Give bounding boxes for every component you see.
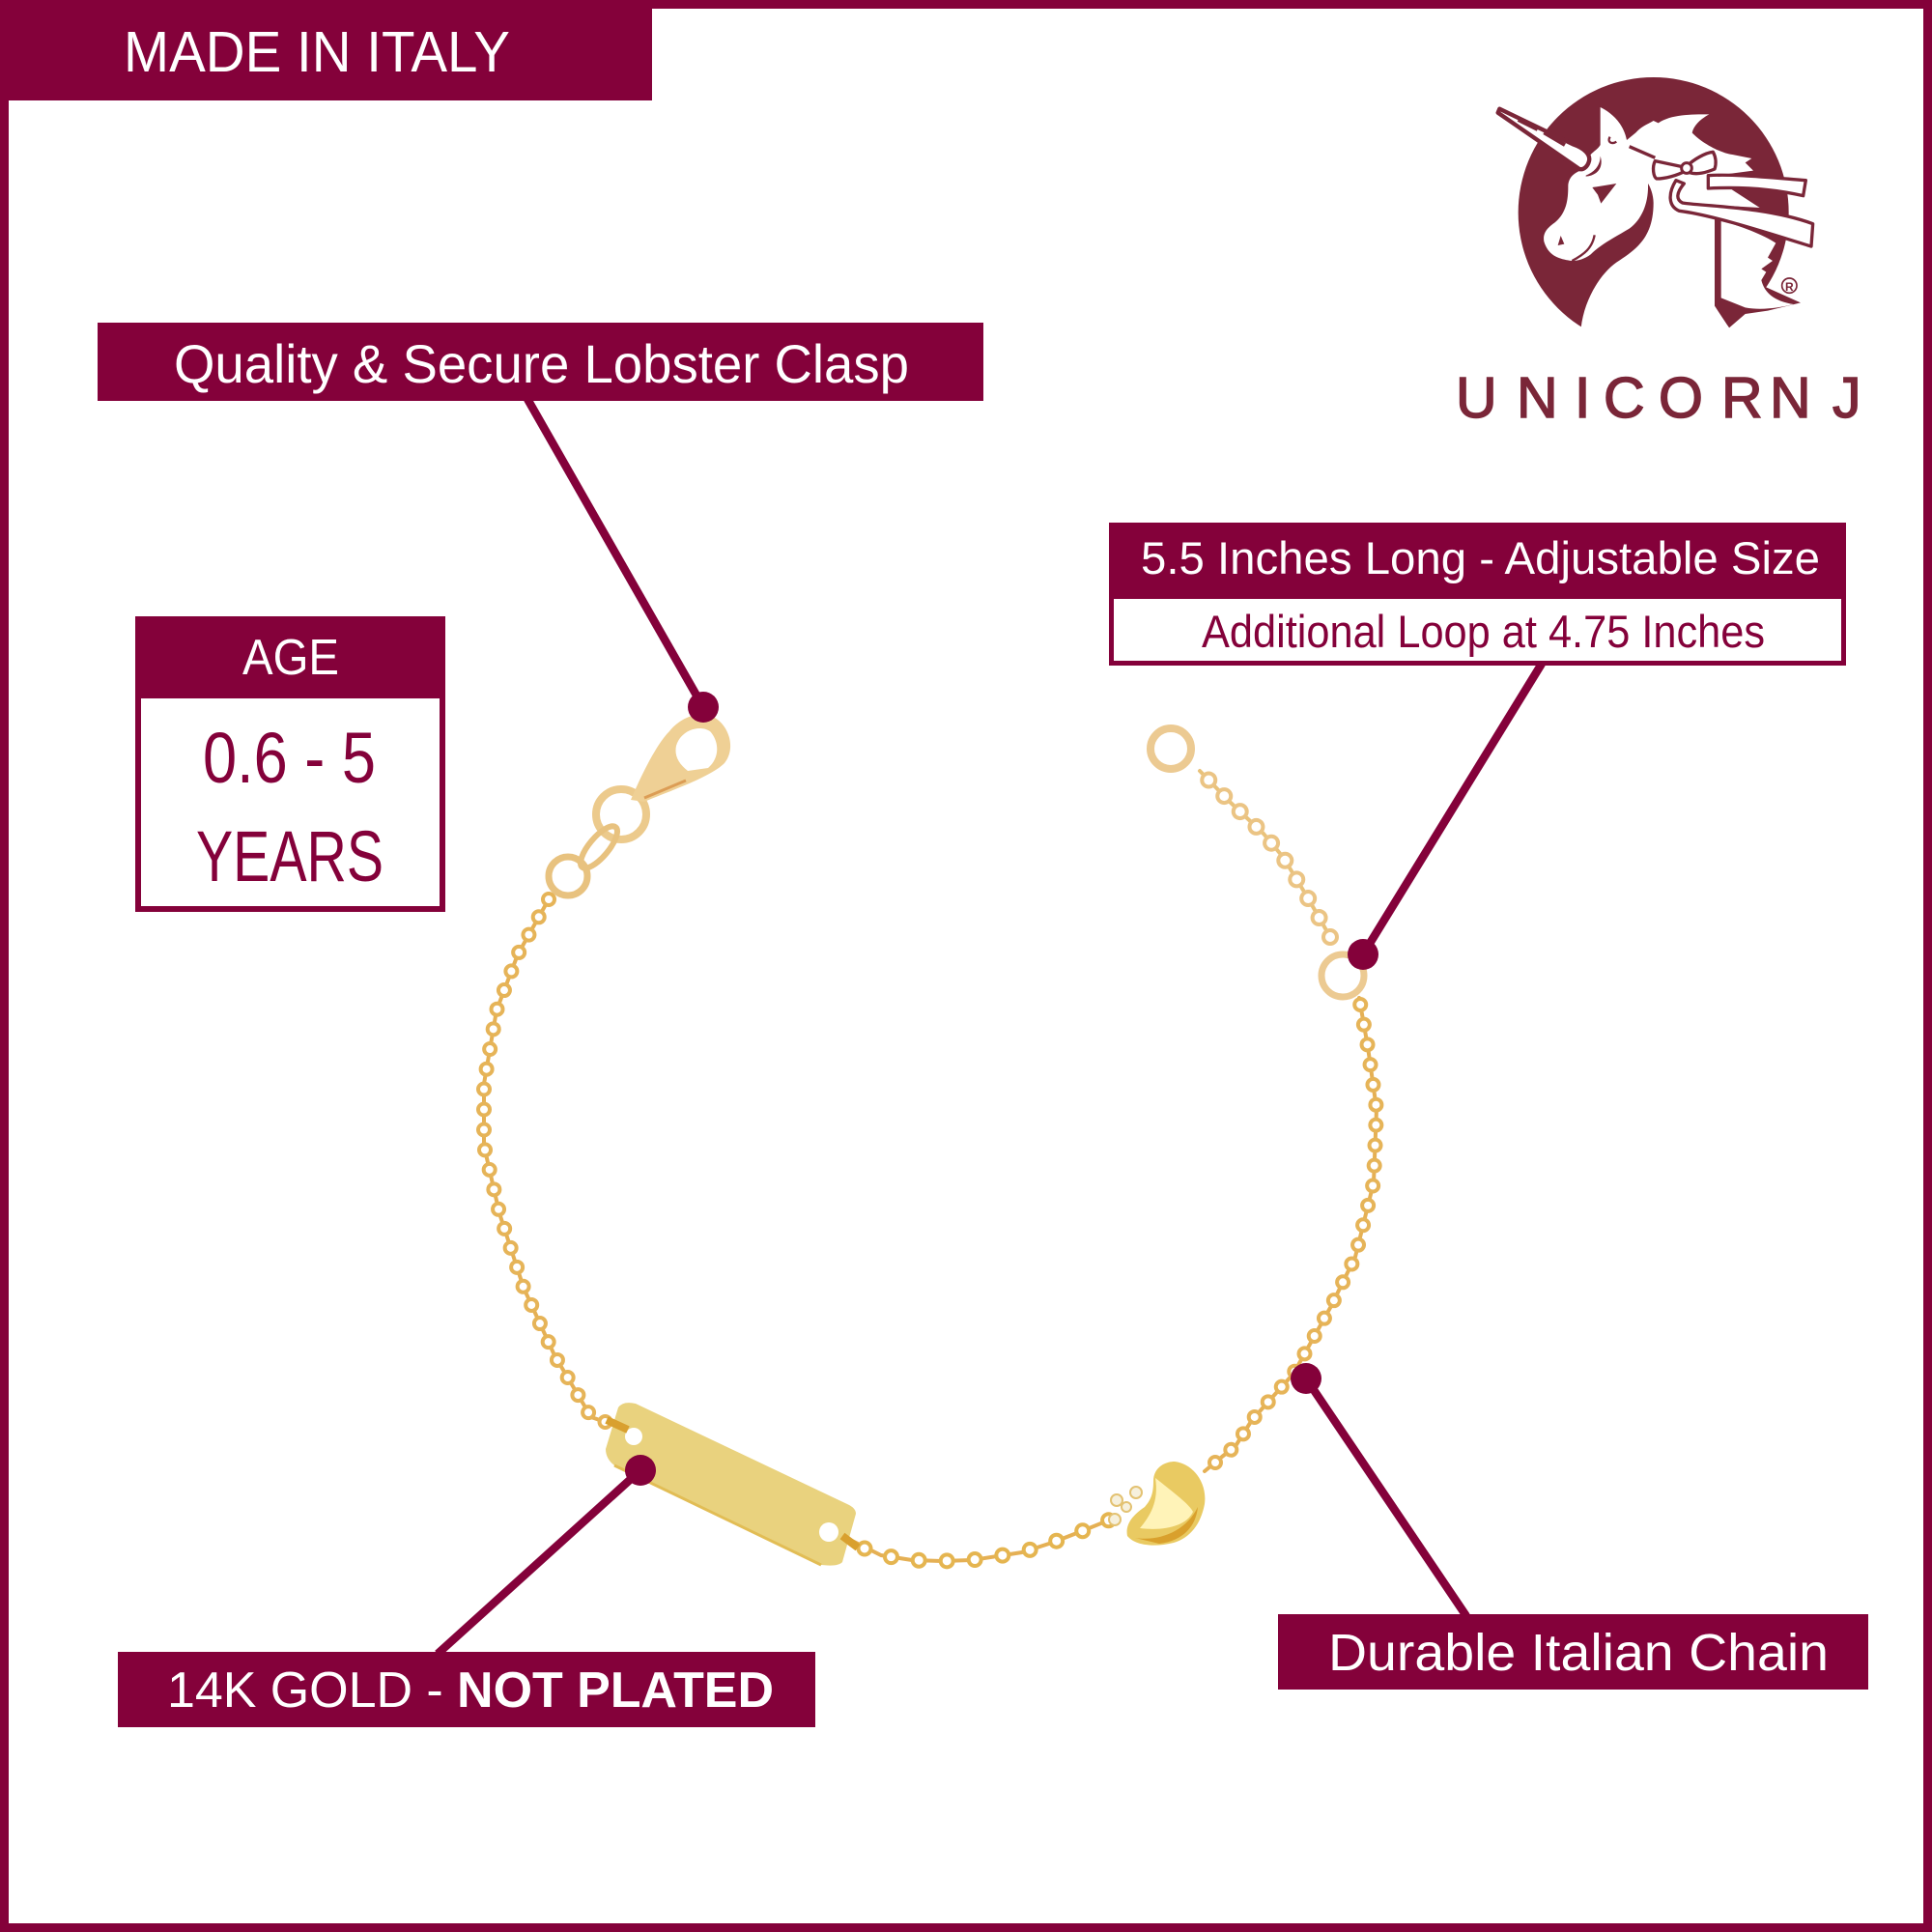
panel: age: 0.6 - 5 [203,718,376,798]
brand name: UNICORNJ [1456,366,1861,430]
panel: age: AGE [242,630,339,686]
lobster clasp [549,715,730,895]
chain: left [484,899,628,1430]
callout: chain: Durable Italian Chain [1328,1624,1829,1682]
callout: gold [118,1470,815,1727]
chain: extension [1151,728,1364,997]
callout dots [625,692,1378,1486]
callout: lobster clasp: Quality & Secure Lobster Clasp [174,333,909,394]
banner: made in italy: MADE IN ITALY [124,20,510,84]
heart charm [1109,1462,1205,1546]
callout: lobster clasp [98,323,983,707]
logo: Unicornj [1456,77,1861,430]
panel: age [135,616,445,909]
icon: unicorn head: R [1785,280,1794,294]
id tag [606,1403,858,1566]
chain: bottom [842,1519,1113,1561]
bracelet [484,715,1377,1566]
panel: length: Additional Loop at 4.75 Inches [1202,606,1765,657]
panel: length [1109,523,1846,954]
banner: made in italy [0,0,652,100]
panel: age: YEARS [196,816,384,896]
icon: unicorn head [1498,77,1813,370]
panel: length: 5.5 Inches Long - Adjustable Size [1141,532,1820,583]
callout: gold: 14K GOLD - NOT PLATED [167,1662,774,1719]
callout: chain [1278,1378,1868,1690]
chain: right [1205,998,1377,1471]
